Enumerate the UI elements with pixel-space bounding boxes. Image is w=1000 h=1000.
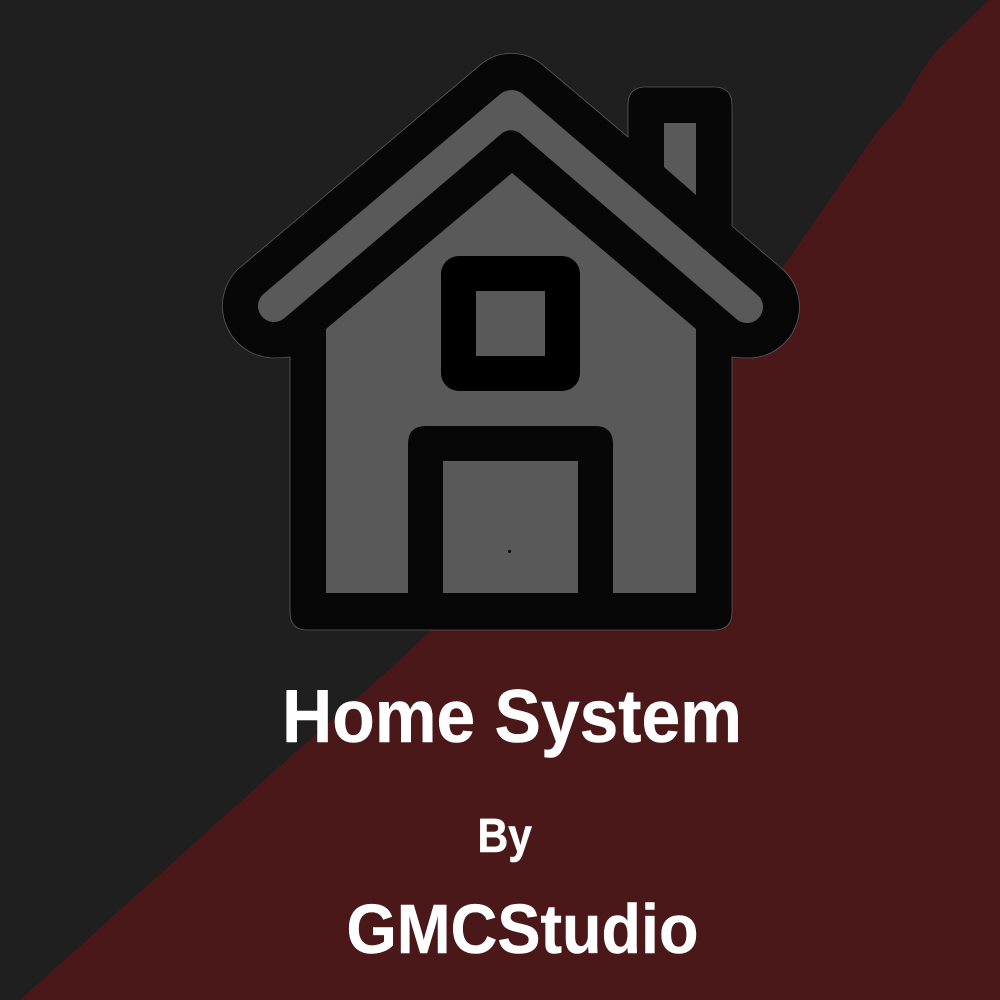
window (441, 256, 580, 391)
door panel (443, 461, 578, 593)
icon: house (223, 53, 799, 630)
chimney opening (664, 123, 696, 195)
house wall (326, 173, 696, 593)
byline label: By (478, 810, 532, 863)
window frame (441, 256, 580, 391)
roof band (258, 90, 763, 323)
house silhouette (223, 53, 799, 630)
door knob dot (508, 550, 511, 553)
door frame (408, 426, 613, 600)
door (408, 426, 613, 600)
window pane (476, 291, 545, 356)
studio name: GMCStudio (346, 890, 698, 968)
title: Home System (282, 674, 742, 758)
